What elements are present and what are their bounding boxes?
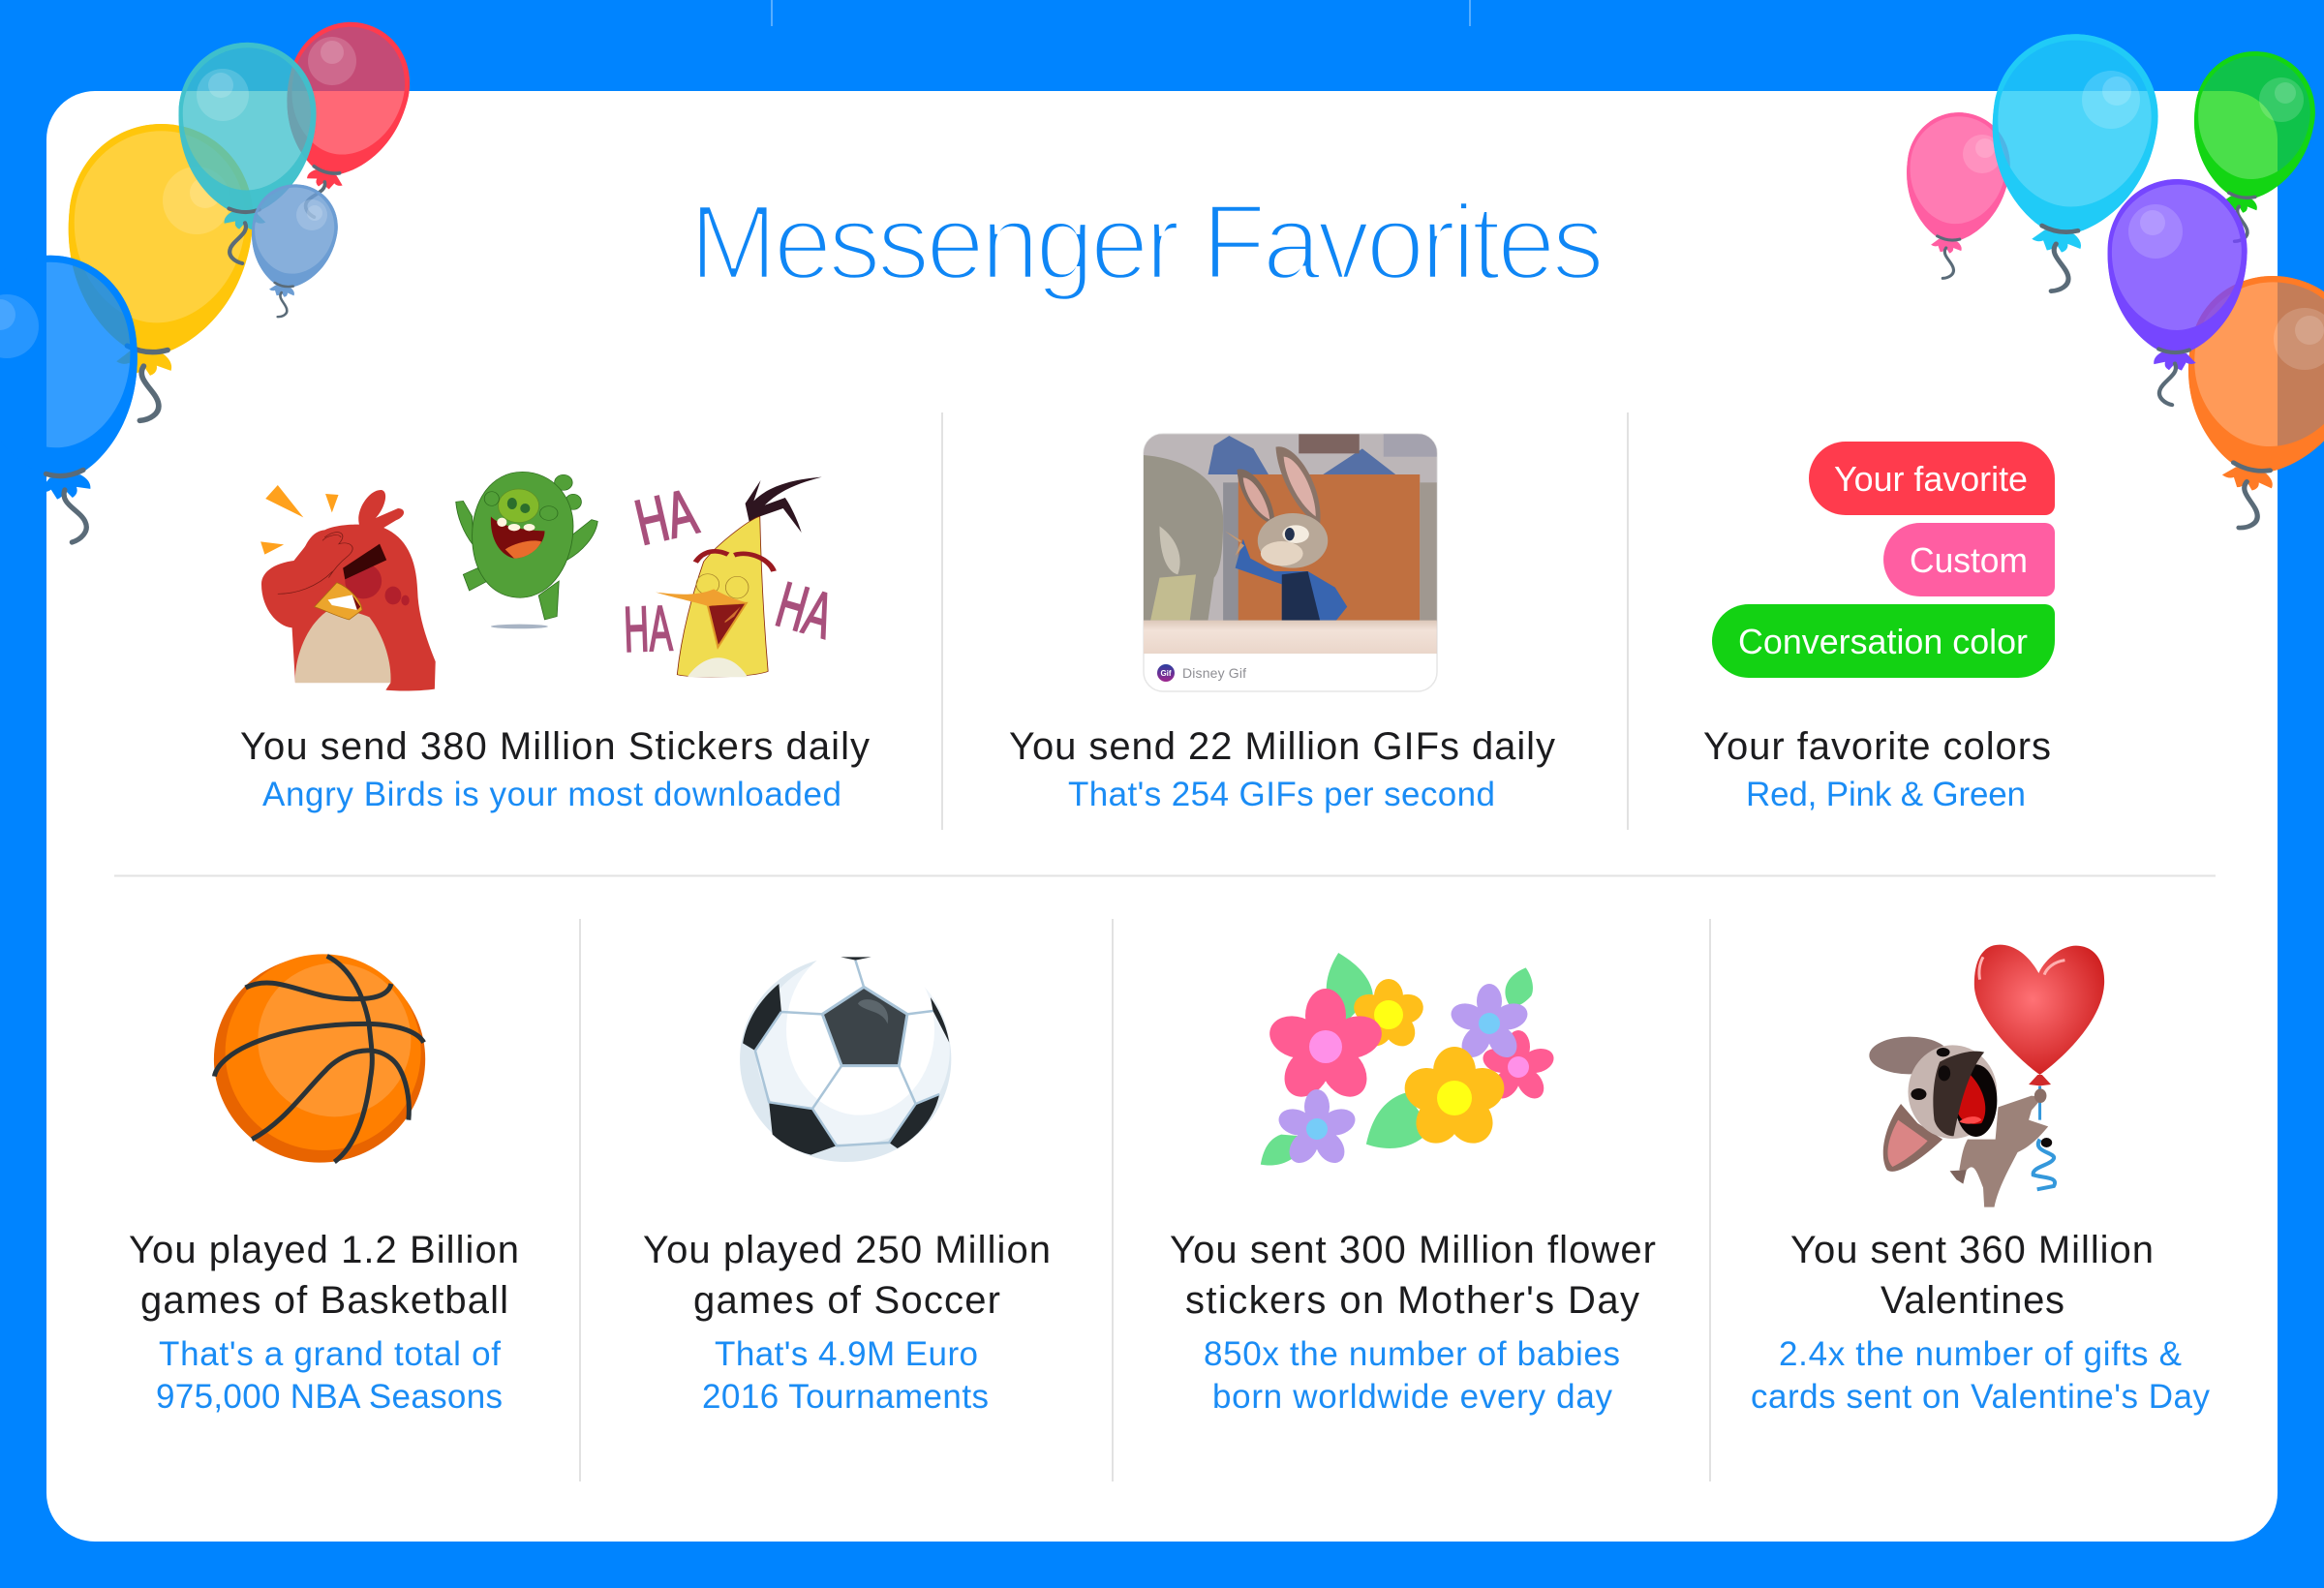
sticker text: HA: HA bbox=[769, 568, 841, 652]
heading: stickers on Mother's Day bbox=[1185, 1279, 1639, 1322]
flower: purple upper bbox=[1448, 984, 1531, 1063]
heading: You sent 360 Million bbox=[1790, 1229, 2154, 1271]
subheading: That's 4.9M Euro bbox=[715, 1335, 978, 1373]
balloon: cyan bbox=[1970, 23, 2169, 302]
title: Messenger Favorites bbox=[689, 183, 1602, 302]
badge text: Gif bbox=[1160, 669, 1172, 678]
panel: flowers bbox=[1170, 953, 1656, 1416]
caption: Disney Gif bbox=[1182, 665, 1246, 681]
panel: stickers bbox=[240, 472, 870, 813]
icon: flowers bbox=[1261, 953, 1557, 1169]
flower: pink large bbox=[1264, 989, 1388, 1106]
icon: yellow bird bbox=[656, 477, 822, 677]
subheading: Red, Pink & Green bbox=[1746, 776, 2026, 813]
bubble: red: Your favorite bbox=[1834, 459, 2028, 499]
balloon: red bbox=[256, 9, 424, 232]
balloon: orange bbox=[2156, 260, 2324, 545]
balloons: right cluster bbox=[1892, 23, 2324, 545]
balloon: yellow bbox=[48, 115, 262, 430]
bubble: green bbox=[1712, 604, 2055, 678]
heading: You played 250 Million bbox=[643, 1229, 1051, 1271]
flower: pink small bbox=[1480, 1030, 1557, 1104]
balloons: left cluster bbox=[0, 9, 424, 551]
balloon: purple bbox=[2102, 177, 2249, 408]
GIF card bbox=[1144, 434, 1437, 691]
subheading: That's a grand total of bbox=[159, 1335, 501, 1373]
heading: Your favorite colors bbox=[1703, 725, 2051, 768]
leaves bbox=[1261, 953, 1533, 1166]
heading: games of Basketball bbox=[140, 1279, 508, 1322]
bubble: red bbox=[1809, 442, 2055, 515]
icon: soccer ball bbox=[740, 944, 951, 1162]
heading: You send 380 Million Stickers daily bbox=[240, 725, 870, 768]
panel: basketball bbox=[129, 954, 519, 1416]
bubble: pink bbox=[1883, 523, 2055, 596]
balloon: big blue bbox=[0, 247, 157, 551]
icon: green pig bbox=[456, 472, 597, 628]
subheading: 975,000 NBA Seasons bbox=[156, 1378, 503, 1416]
bubble: pink: Custom bbox=[1910, 540, 2028, 580]
subheading: cards sent on Valentine's Day bbox=[1751, 1378, 2210, 1416]
heading: You sent 300 Million flower bbox=[1170, 1229, 1656, 1271]
heading: You played 1.2 Billion bbox=[129, 1229, 519, 1271]
subheading: 2.4x the number of gifts & bbox=[1779, 1335, 2182, 1373]
panel: colors bbox=[1703, 442, 2055, 813]
subheading: That's 254 GIFs per second bbox=[1068, 776, 1495, 813]
balloon: green bbox=[2175, 43, 2324, 251]
balloon: teal bbox=[173, 40, 319, 265]
balloon: pink bbox=[1892, 106, 2017, 286]
subheading: 850x the number of babies bbox=[1204, 1335, 1620, 1373]
flower: purple lower bbox=[1275, 1089, 1359, 1169]
bubble: green: Conversation color bbox=[1738, 622, 2028, 661]
subheading: born worldwide every day bbox=[1212, 1378, 1613, 1416]
heading: games of Soccer bbox=[693, 1279, 1000, 1322]
panel: soccer bbox=[643, 944, 1051, 1416]
icon: GIF badge bbox=[1157, 664, 1175, 682]
panel: GIFs bbox=[1009, 434, 1555, 813]
subheading: Angry Birds is your most downloaded bbox=[262, 776, 841, 813]
image: rabbit GIF frame bbox=[1144, 434, 1437, 654]
balloon: small steel blue bbox=[236, 177, 345, 325]
subheading: 2016 Tournaments bbox=[702, 1378, 989, 1416]
heading: You send 22 Million GIFs daily bbox=[1009, 725, 1555, 768]
icon: dog with heart balloon bbox=[1869, 945, 2104, 1207]
flower: orange small bbox=[1350, 979, 1427, 1053]
panel: valentines bbox=[1751, 945, 2210, 1416]
flower: orange large bbox=[1399, 1047, 1510, 1152]
heading: Valentines bbox=[1881, 1279, 2064, 1322]
sticker text: HA: HA bbox=[623, 592, 673, 665]
icon: basketball bbox=[214, 954, 425, 1163]
icon: red angry bird bbox=[260, 485, 436, 691]
sticker text: HA: HA bbox=[628, 475, 703, 559]
